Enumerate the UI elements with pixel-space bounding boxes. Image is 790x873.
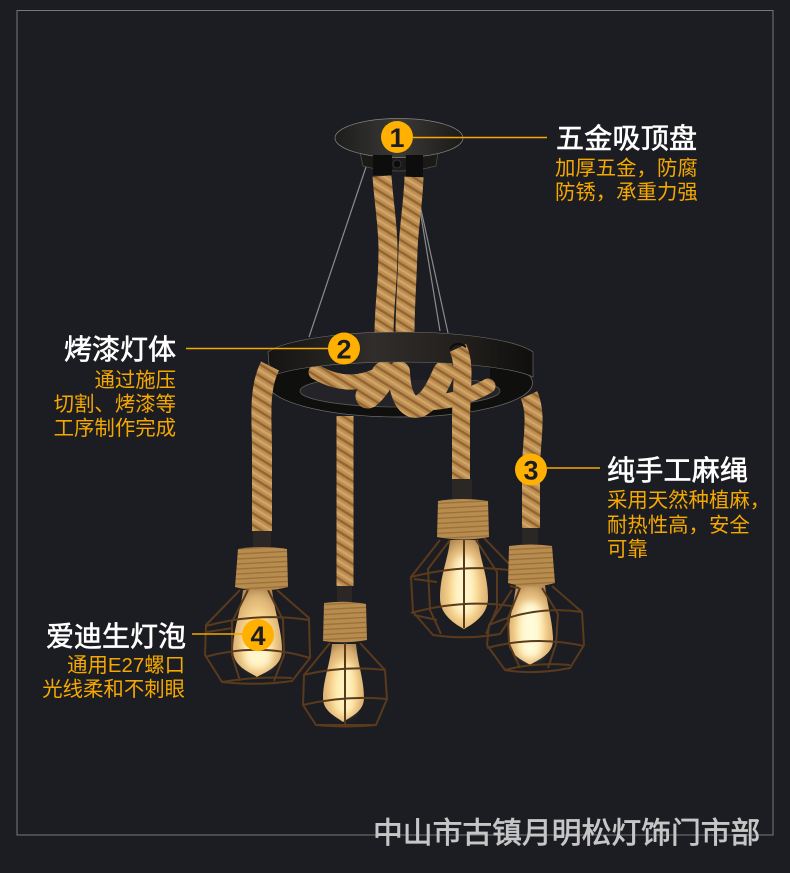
heading: 烤漆灯体 [64, 334, 176, 365]
leader line [547, 467, 600, 469]
description: 防锈，承重力强 [555, 181, 698, 204]
watermark: 中山市古镇月明松灯饰门市部 [373, 817, 760, 850]
lower ropes [261, 348, 534, 586]
description: 可靠 [607, 538, 648, 561]
rope wrap [437, 499, 489, 540]
badge 3 [515, 454, 547, 486]
badge 1: 1 [389, 123, 405, 153]
badge 1 [381, 121, 413, 153]
ring hole for rope [450, 344, 466, 349]
bulb [233, 590, 282, 677]
heading: 五金吸顶盘 [556, 123, 697, 154]
description: 通过施压 [94, 369, 176, 392]
chandelier [261, 118, 534, 586]
ceiling plate [335, 118, 463, 177]
badge 2: 2 [336, 334, 352, 364]
ring underside [268, 349, 532, 417]
cage [487, 586, 584, 672]
ropes inside ring [316, 372, 488, 407]
leader line [186, 348, 328, 350]
suspension wires [309, 155, 448, 337]
callout 2: lamp body [54, 332, 360, 440]
description: 通用E27螺口 [67, 654, 185, 677]
description [54, 369, 176, 440]
cage [303, 643, 387, 726]
lamp 4 [487, 528, 584, 672]
description: 耐热性高，安全 [607, 514, 750, 537]
description: 切割、烤漆等 [54, 393, 176, 416]
description [607, 489, 770, 561]
rope wrap [508, 544, 555, 586]
badge 2 [328, 332, 360, 364]
lamp 1 [205, 531, 310, 684]
bulb [440, 540, 488, 629]
callout 1: ceiling plate [381, 121, 698, 204]
badge 4: 4 [250, 621, 266, 651]
rope wrap [235, 547, 288, 590]
leader line [413, 136, 547, 138]
cage [205, 590, 310, 684]
description [42, 654, 185, 701]
callout 4: Edison bulb [42, 619, 274, 701]
upper ropes [382, 176, 414, 335]
description: 工序制作完成 [54, 417, 176, 440]
description: 加厚五金，防腐 [555, 157, 698, 180]
heading: 纯手工麻绳 [607, 455, 748, 486]
description [555, 157, 698, 204]
badge 4 [242, 619, 274, 651]
lamp 3 [411, 479, 517, 637]
description: 采用天然种植麻， [607, 489, 770, 512]
leader line [192, 633, 242, 635]
rope wrap [323, 602, 367, 642]
bulb [508, 585, 553, 665]
ring band [268, 332, 533, 377]
badge 3: 3 [523, 456, 539, 486]
heading: 爱迪生灯泡 [46, 621, 186, 652]
callout 3: hemp rope [515, 454, 770, 561]
description: 光线柔和不刺眼 [42, 678, 185, 701]
bulb [323, 644, 364, 722]
cage [411, 538, 517, 637]
lamp 2 [303, 586, 387, 726]
